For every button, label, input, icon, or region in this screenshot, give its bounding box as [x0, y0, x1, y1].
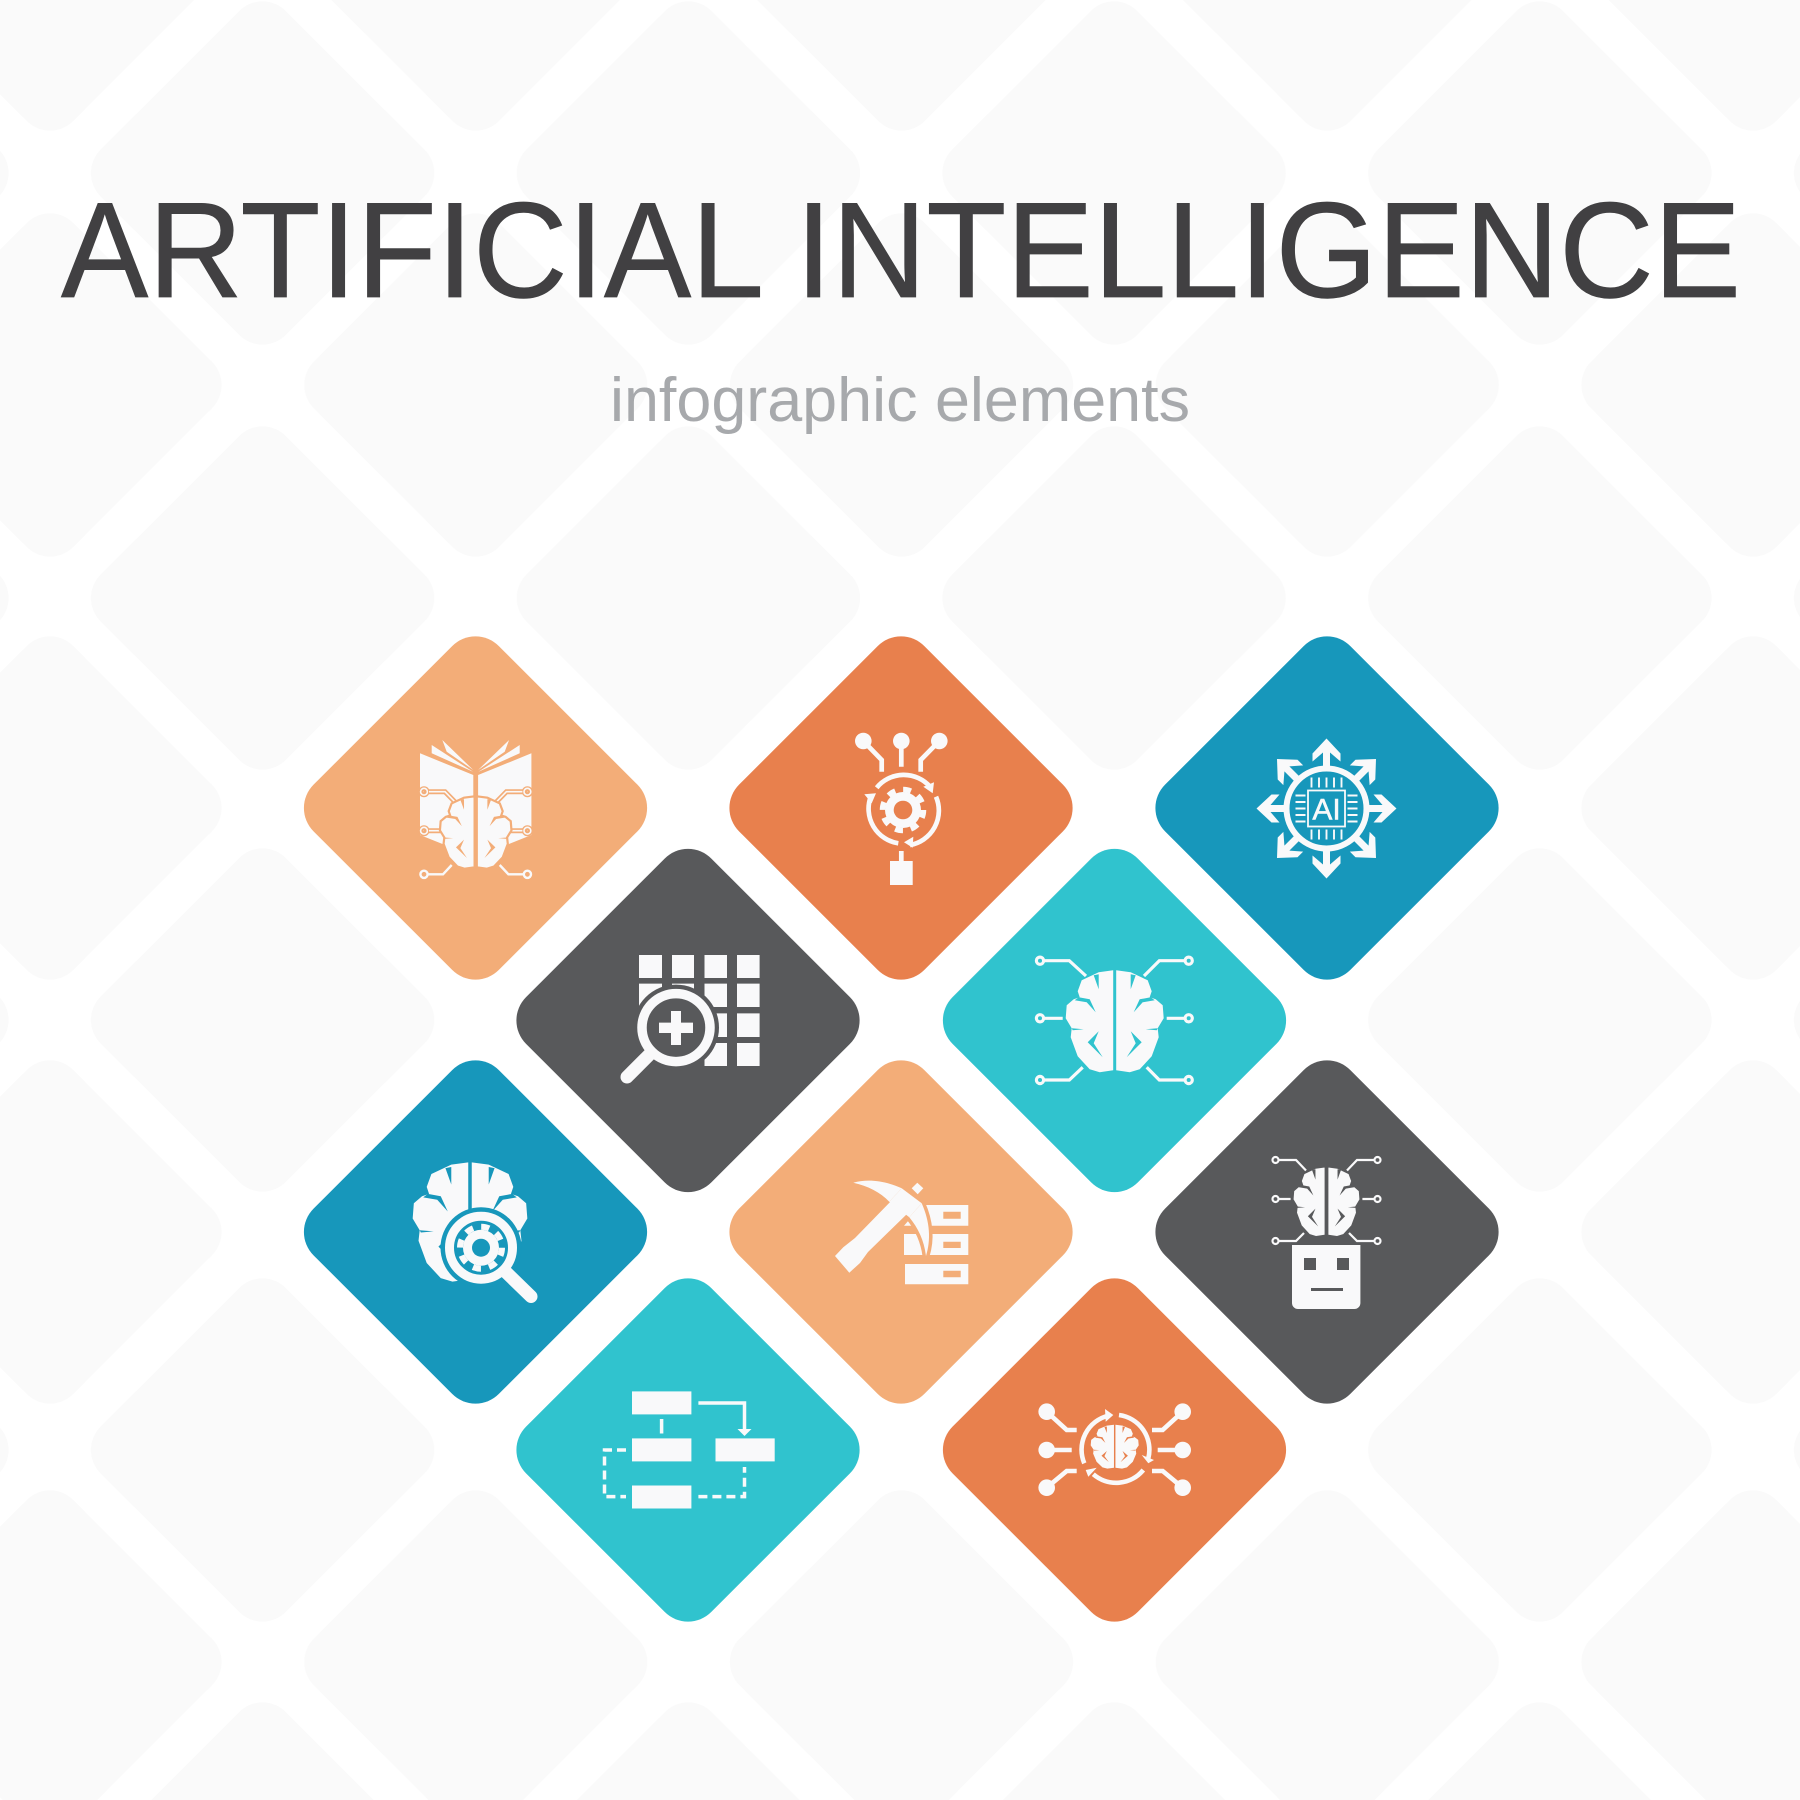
icon: pickaxe and server — [835, 1181, 968, 1284]
panel: algorithm flowchart — [503, 1265, 873, 1635]
icon: brain with circuit nodes — [1036, 957, 1192, 1084]
icon: brain cycle network — [1038, 1403, 1191, 1496]
panel: brain network cycle — [929, 1265, 1300, 1635]
AI label: AI — [1312, 794, 1341, 826]
icon: AI chip with arrows — [1256, 738, 1396, 878]
panel: brain analysis — [290, 1047, 661, 1417]
panel: data search — [503, 835, 873, 1206]
panel: neural brain — [929, 835, 1300, 1206]
panel: robot brain — [1142, 1047, 1512, 1417]
icon: flowchart — [604, 1391, 775, 1508]
panel: machine learning process — [716, 623, 1086, 993]
icon: robot head with brain — [1272, 1157, 1380, 1309]
icon: gear cycle with nodes — [855, 733, 948, 885]
subtitle: infographic elements — [610, 366, 1190, 435]
panel: data mining — [716, 1047, 1086, 1417]
title: ARTIFICIAL INTELLIGENCE — [61, 174, 1741, 326]
panel: AI chip — [1142, 623, 1512, 993]
icon: book with brain — [420, 740, 531, 878]
icon: grid and magnifier — [627, 955, 760, 1077]
icon: brain with gear magnifier — [413, 1162, 531, 1296]
panel: book and brain — [290, 623, 661, 993]
